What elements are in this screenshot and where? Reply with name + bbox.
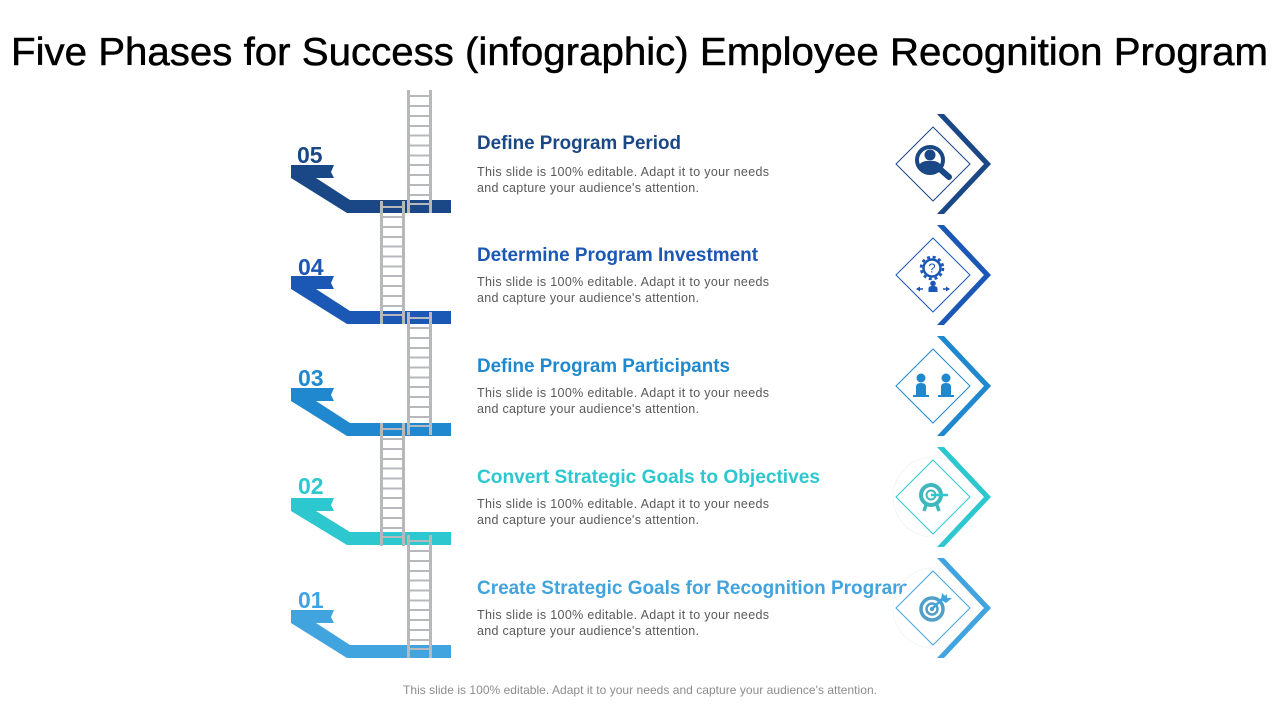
ladder 5 [408, 90, 430, 213]
icon badge 04: gear with question mark and person [896, 225, 991, 325]
text block 02 [477, 467, 820, 527]
ladder 1 [408, 535, 430, 658]
text block 03: This slide is 100% editable. Adapt it to your needs [477, 386, 769, 400]
step 04 banner: 04 [298, 254, 324, 280]
text block 02: This slide is 100% editable. Adapt it to your needs [477, 497, 769, 511]
ladder 4 [382, 201, 404, 324]
text block 04: Determine Program Investment [477, 245, 759, 266]
text block 01: and capture your audience's attention. [477, 624, 699, 638]
step 04 banner [291, 254, 451, 324]
text block 05: and capture your audience's attention. [477, 181, 699, 195]
footer note: This slide is 100% editable. Adapt it to your needs and capture your audience's attention. [403, 683, 877, 697]
text block 01: This slide is 100% editable. Adapt it to your needs [477, 608, 769, 622]
ladder 2 [382, 423, 404, 546]
icon badge 05: magnifier with person [896, 114, 991, 214]
step 05 banner: 05 [297, 142, 323, 168]
icon badge 03: two people [896, 336, 991, 436]
text block 05 [477, 133, 769, 195]
icon badge 02: target on stand [893, 447, 991, 547]
text block 05: This slide is 100% editable. Adapt it to your needs [477, 165, 769, 179]
text block 03 [477, 356, 769, 416]
title: Five Phases for Success (infographic) Employee Recognition Program [11, 31, 1268, 74]
text block 03: and capture your audience's attention. [477, 402, 699, 416]
step 02 banner [291, 473, 451, 545]
step 01 banner: 01 [298, 587, 324, 613]
text block 01 [477, 578, 909, 638]
text block 03: Define Program Participants [477, 356, 730, 377]
text block 02: and capture your audience's attention. [477, 513, 699, 527]
icon badge 01: target with arrow [893, 558, 991, 658]
text block 04: This slide is 100% editable. Adapt it to your needs [477, 275, 769, 289]
text block 02: Convert Strategic Goals to Objectives [477, 467, 820, 488]
step 02 banner: 02 [298, 473, 324, 499]
text block 04 [477, 245, 769, 305]
step 03 banner [291, 365, 451, 436]
text block 04: and capture your audience's attention. [477, 291, 699, 305]
text block 01: Create Strategic Goals for Recognition Program [477, 578, 909, 599]
step 03 banner: 03 [298, 365, 324, 391]
ladder 3 [408, 312, 430, 435]
step 01 banner [291, 587, 451, 658]
icon badge 04: gear with question mark and person: ? [928, 260, 936, 276]
text block 05: Define Program Period [477, 133, 681, 154]
step 05 banner [291, 142, 451, 213]
